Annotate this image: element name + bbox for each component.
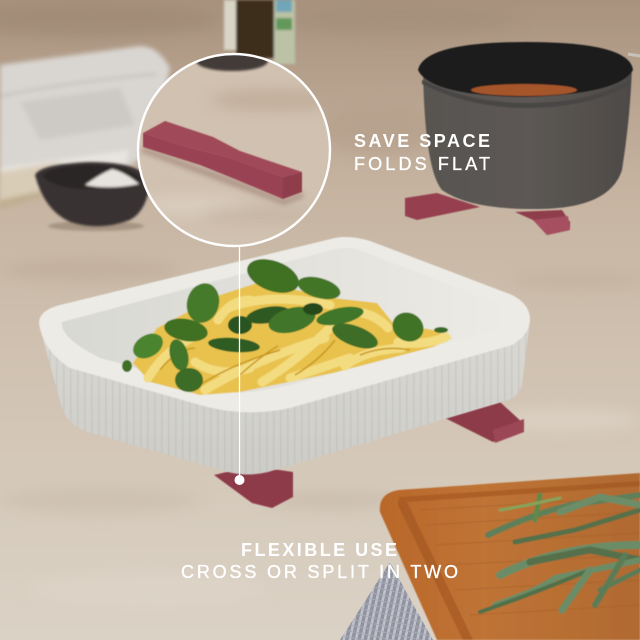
white baking dish with pasta — [39, 237, 530, 474]
folded trivet — [143, 121, 302, 199]
leader line from callout to trivet — [234, 246, 244, 485]
callout text: flexible use — [181, 540, 458, 582]
callout text: save space: FOLDS FLAT — [354, 154, 490, 174]
callout text: save space: SAVE SPACE — [354, 131, 490, 151]
saucepan on trivet — [405, 42, 640, 235]
trivet under pan — [405, 193, 570, 235]
foreground trivet legs under dish — [214, 402, 524, 508]
basil leaves — [122, 253, 448, 392]
pasta — [133, 282, 452, 395]
callout text: flexible use: CROSS OR SPLIT IN TWO — [181, 562, 458, 582]
callout text: save space — [354, 131, 490, 174]
open book — [0, 46, 170, 209]
dish interior — [62, 248, 513, 393]
cutting board with herbs — [380, 473, 640, 640]
magnifier callout with folded trivet — [136, 52, 332, 248]
tea towel — [340, 562, 433, 640]
small black bowl with salt — [35, 162, 150, 231]
callout text: flexible use: FLEXIBLE USE — [241, 540, 397, 560]
dish rim — [39, 237, 530, 412]
bottle in background — [224, 0, 295, 64]
herb sprigs — [480, 495, 640, 612]
